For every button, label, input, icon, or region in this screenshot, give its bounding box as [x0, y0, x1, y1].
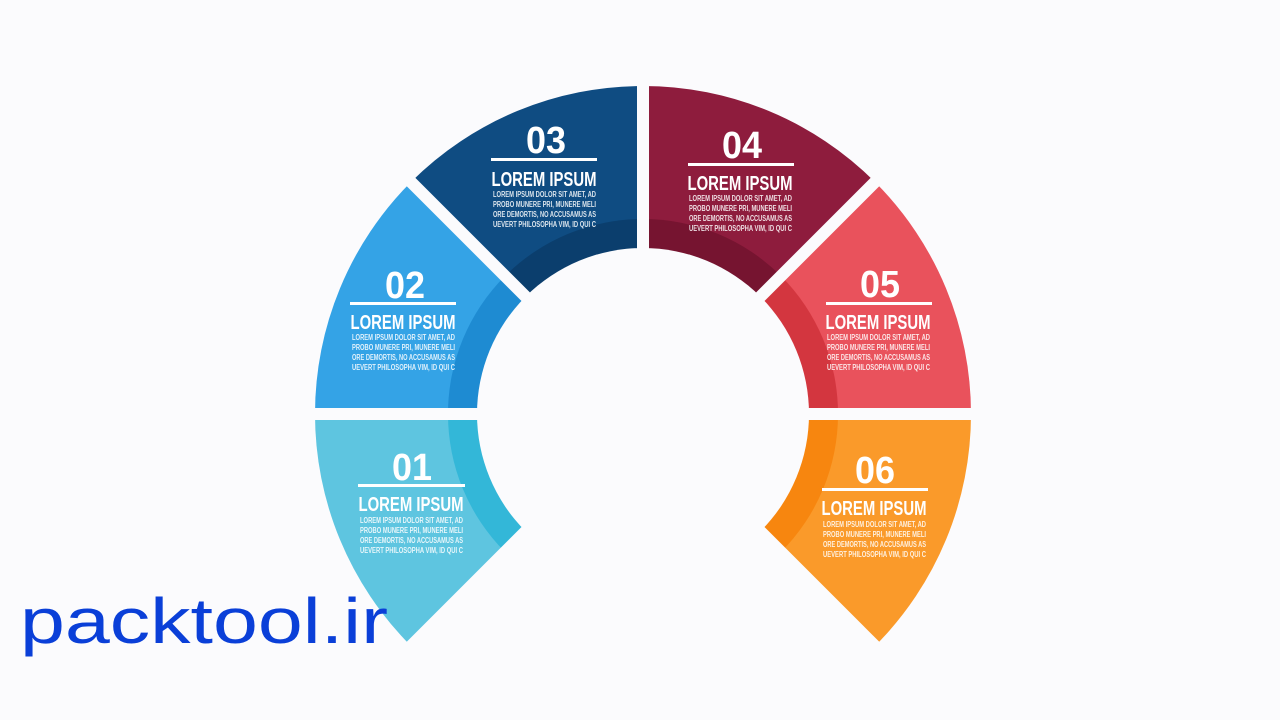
segment 05: [643, 182, 971, 414]
text block 06: PROBO MUNERE PRI, MUNERE MELI: [823, 530, 926, 539]
segment 06: [643, 414, 971, 646]
text block 02: LOREM IPSUM DOLOR SIT AMET, AD: [352, 333, 455, 342]
text block 01: UEVERT PHILOSOPHA VIM, ID QUI C: [360, 546, 463, 555]
ring chart: [300, 70, 990, 720]
segment 01: [315, 414, 643, 646]
text block 01: [358, 447, 465, 555]
text block 04: LOREM IPSUM: [688, 173, 792, 195]
text block 05: LOREM IPSUM: [826, 312, 930, 334]
text block 05: LOREM IPSUM DOLOR SIT AMET, AD: [827, 333, 930, 342]
text block 06: LOREM IPSUM DOLOR SIT AMET, AD: [823, 520, 926, 529]
text block 03: LOREM IPSUM: [492, 169, 596, 191]
text block 03: 03: [526, 120, 566, 162]
text block 03: LOREM IPSUM DOLOR SIT AMET, AD: [493, 190, 596, 199]
text block 02: 02: [385, 265, 425, 307]
text block 04: PROBO MUNERE PRI, MUNERE MELI: [689, 204, 792, 213]
text block 02: ORE DEMORTIS, NO ACCUSAMUS AS: [352, 353, 455, 362]
text block 01: LOREM IPSUM: [358, 494, 464, 516]
text block 06: [822, 450, 928, 559]
text block 06: 06: [855, 450, 895, 492]
text block 03: [491, 120, 597, 229]
text block 01: LOREM IPSUM DOLOR SIT AMET, AD: [360, 516, 463, 525]
text block 01: ORE DEMORTIS, NO ACCUSAMUS AS: [360, 536, 463, 545]
segment 02: [315, 182, 643, 414]
text block 04: ORE DEMORTIS, NO ACCUSAMUS AS: [689, 214, 792, 223]
text block 04: 04: [722, 125, 762, 167]
text block 02: [350, 265, 456, 372]
text block 05: UEVERT PHILOSOPHA VIM, ID QUI C: [827, 363, 930, 372]
text block 02: UEVERT PHILOSOPHA VIM, ID QUI C: [352, 363, 455, 372]
text block 06: ORE DEMORTIS, NO ACCUSAMUS AS: [823, 540, 926, 549]
text block 02: LOREM IPSUM: [350, 312, 456, 334]
text block 04: LOREM IPSUM DOLOR SIT AMET, AD: [689, 194, 792, 203]
segment 03: [411, 86, 643, 414]
text block 05: ORE DEMORTIS, NO ACCUSAMUS AS: [827, 353, 930, 362]
text block 03: ORE DEMORTIS, NO ACCUSAMUS AS: [493, 210, 596, 219]
watermark: packtool.ir: [20, 585, 388, 657]
text block 05: [826, 264, 932, 372]
text block 01: 01: [392, 447, 432, 489]
text block 06: UEVERT PHILOSOPHA VIM, ID QUI C: [823, 550, 926, 559]
text block 02: PROBO MUNERE PRI, MUNERE MELI: [352, 343, 455, 352]
text block 03: UEVERT PHILOSOPHA VIM, ID QUI C: [493, 220, 596, 229]
text block 05: 05: [860, 264, 900, 306]
text block 05: PROBO MUNERE PRI, MUNERE MELI: [827, 343, 930, 352]
text block 04: [688, 125, 794, 233]
segment 04: [643, 86, 875, 414]
text block 06: LOREM IPSUM: [822, 498, 926, 520]
text block 01: PROBO MUNERE PRI, MUNERE MELI: [360, 526, 463, 535]
text block 03: PROBO MUNERE PRI, MUNERE MELI: [493, 200, 596, 209]
text block 04: UEVERT PHILOSOPHA VIM, ID QUI C: [689, 224, 792, 233]
